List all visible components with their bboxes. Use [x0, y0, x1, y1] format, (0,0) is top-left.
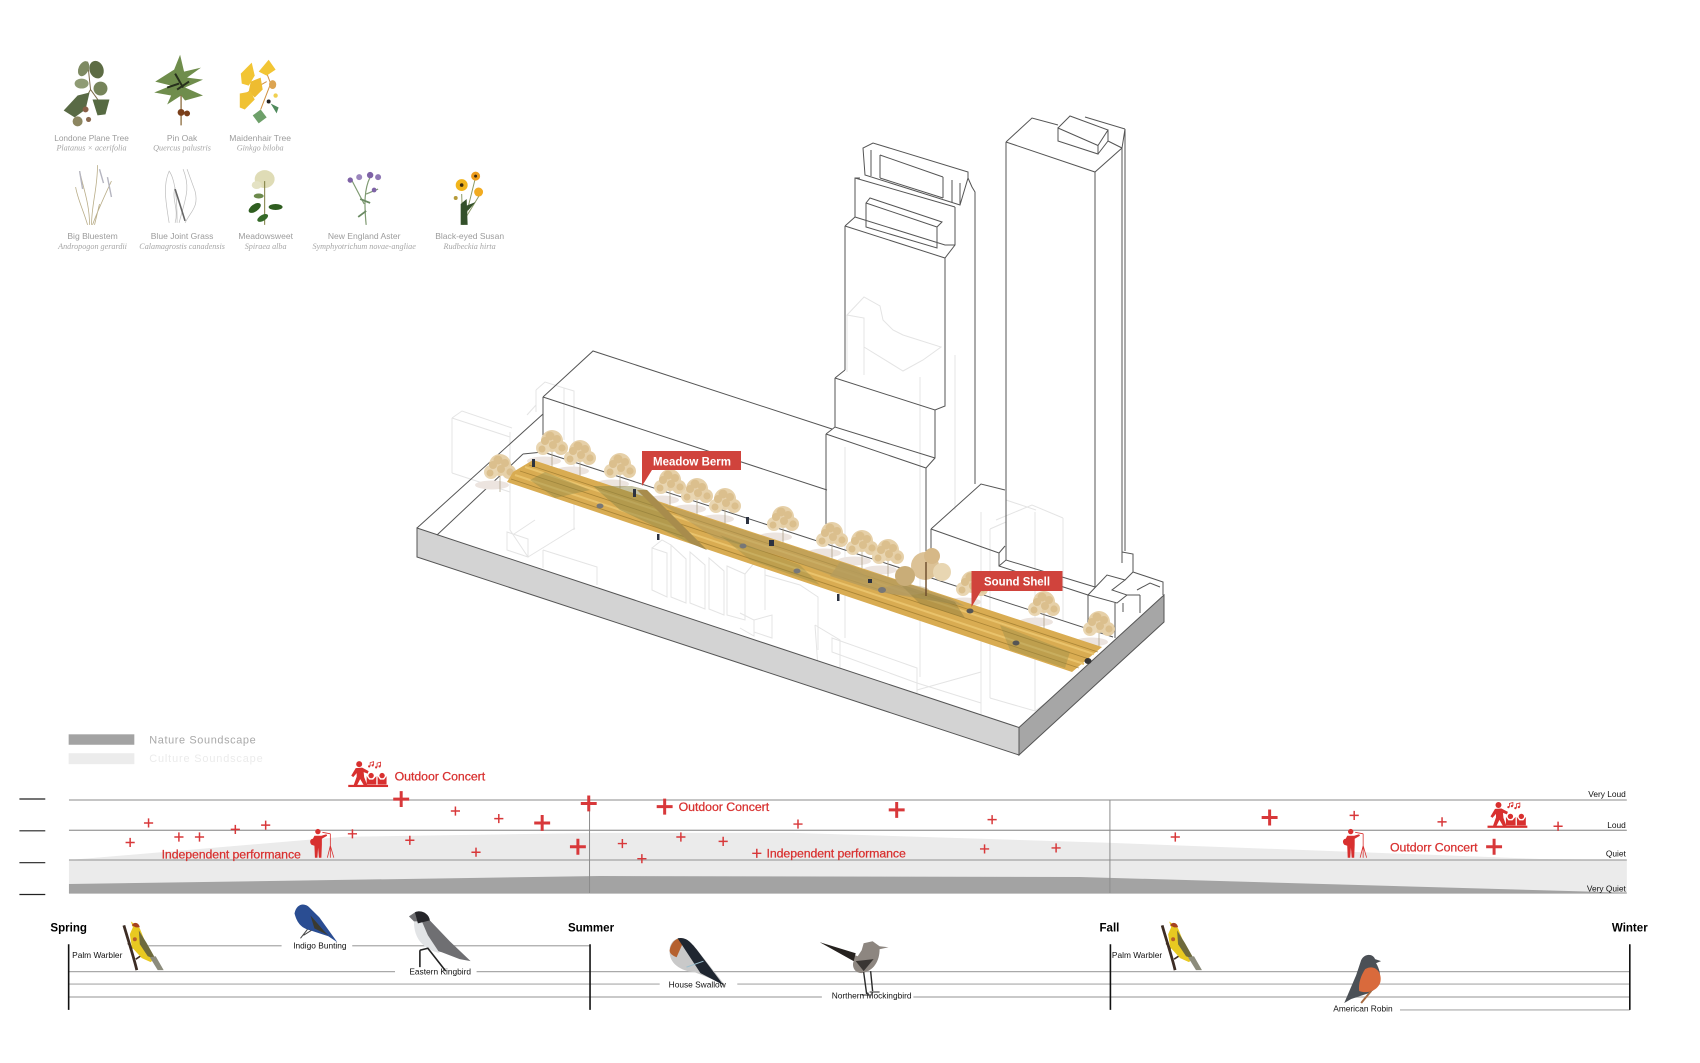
season bars [69, 944, 1630, 1010]
plant name: Maidenhair Tree [229, 133, 291, 153]
legend swatch: nature [69, 734, 134, 745]
plant name: Meadowsweet: Meadowsweet [238, 231, 294, 241]
bird: American Robin [1344, 955, 1381, 1003]
season labels: Fall [1099, 922, 1119, 934]
plant name: Big Bluestem: Big Bluestem [67, 231, 118, 241]
large event markers [393, 791, 1502, 855]
level lines [69, 800, 1627, 893]
bird: Indigo Bunting [295, 905, 337, 942]
meadow berm crossing [593, 486, 707, 550]
label: Independent performance: Independent performance [162, 848, 301, 862]
left axis ticks [19, 799, 45, 895]
bird: Palm Warbler (fall) [1162, 921, 1202, 970]
plant name: Pin Oak [153, 133, 211, 153]
plant name: Pin Oak: Quercus palustris [153, 144, 211, 153]
tall tower [1006, 116, 1125, 588]
plant: Blue Joint Grass [165, 169, 196, 223]
icon: singer [1343, 829, 1367, 858]
plant name: Big Bluestem: Andropogon gerardii [57, 242, 128, 251]
people on walkway [532, 459, 1092, 664]
bird: House Swallow [670, 938, 726, 987]
base slab: top outline [417, 414, 543, 535]
plant: Pin Oak [154, 55, 203, 125]
plant name: Big Bluestem [57, 231, 128, 251]
season labels: Winter [1612, 922, 1648, 934]
season labels [50, 922, 1648, 934]
plant name: New England Aster: New England Aster [328, 231, 401, 241]
callout: Meadow Berm: Meadow Berm [653, 456, 731, 468]
label: Eastern Kingbird: Eastern Kingbird [409, 967, 471, 977]
label: Outdoor Concert: Outdoor Concert [395, 770, 486, 784]
callout: Meadow Berm [642, 451, 741, 486]
mid tower [826, 143, 975, 560]
plant name: Meadowsweet: Spiraea alba [245, 242, 287, 251]
plant name: Blue Joint Grass: Blue Joint Grass [151, 231, 213, 241]
level labels: Quiet [1606, 849, 1627, 859]
plant name: Blue Joint Grass [139, 231, 225, 251]
low block [523, 351, 832, 490]
season labels: Spring [50, 922, 87, 934]
plant name: London Plane Tree [54, 133, 129, 153]
base slab: front face [417, 528, 1019, 755]
legend swatch: culture [69, 753, 134, 764]
callout: Sound Shell: Sound Shell [984, 576, 1050, 588]
level labels [1587, 789, 1627, 894]
plant name: Black-eyed Susan: Rudbeckia hirta [443, 242, 496, 251]
soundscape chart [19, 761, 1627, 895]
faint neighbouring buildings [452, 297, 1063, 716]
plant name: Black-eyed Susan [435, 231, 504, 251]
label: House Swallow: House Swallow [669, 980, 727, 990]
bird: Palm Warbler (spring) [124, 921, 164, 970]
culture soundscape area [69, 833, 1627, 893]
plant: Maidenhair Tree [240, 60, 279, 123]
label: American Robin: American Robin [1333, 1004, 1393, 1014]
label: Outdoor Concert: Outdoor Concert [679, 800, 770, 814]
base slab: side face [1019, 595, 1164, 755]
elevated walkway edge [543, 452, 1113, 637]
plant: Black-eyed Susan [454, 172, 483, 225]
plant name: Maidenhair Tree: Maidenhair Tree [229, 133, 291, 143]
soundscape legend [69, 734, 263, 765]
plaza [660, 503, 880, 585]
label: Palm Warbler: Palm Warbler [72, 950, 123, 960]
plant name: New England Aster [313, 231, 416, 251]
plant: Meadowsweet [247, 170, 283, 225]
large tree at plaza [881, 548, 951, 596]
plant name: Pin Oak: Pin Oak [167, 133, 198, 143]
nature soundscape area [69, 876, 1627, 893]
plant name: Blue Joint Grass: Calamagrostis canadensis [139, 242, 225, 251]
plant legend [54, 55, 504, 251]
label: Independent performance: Independent performance [767, 847, 906, 861]
icon: concert [348, 761, 388, 787]
icon: concert [1488, 802, 1527, 828]
legend label: culture: Culture Soundscape [149, 753, 263, 765]
staff lines [69, 946, 1630, 1010]
meadow walkway band [507, 460, 1102, 672]
legend label: nature: Nature Soundscape [149, 734, 256, 746]
plant name: Meadowsweet [238, 231, 294, 251]
callout: Sound Shell [972, 571, 1062, 607]
plant: Big Bluestem [76, 165, 111, 225]
icon: singer [310, 829, 334, 858]
label: Outdorr Concert: Outdorr Concert [1390, 841, 1478, 855]
plant name: Black-eyed Susan: Black-eyed Susan [435, 231, 504, 241]
bird timeline [50, 905, 1648, 1014]
level labels: Loud [1607, 820, 1626, 830]
small podium blocks [931, 484, 1163, 638]
label: Northern Mockingbird: Northern Mockingbird [832, 990, 912, 1000]
bird: Eastern Kingbird [409, 911, 471, 971]
label: Palm Warbler: Palm Warbler [1112, 950, 1162, 960]
plant name: London Plane Tree: Platanus × acerifolia [55, 144, 127, 153]
level labels: Very Loud [1588, 789, 1626, 799]
season labels: Summer [568, 922, 615, 934]
plant name: London Plane Tree: Londone Plane Tree [54, 133, 129, 143]
bird: Northern Mockingbird [820, 941, 889, 995]
plant name: Maidenhair Tree: Ginkgo biloba [237, 144, 284, 153]
small event markers [126, 806, 1563, 863]
plant: New England Aster [348, 172, 381, 225]
trees along the walkway [475, 430, 1115, 649]
axonometric building model [417, 116, 1164, 755]
plant name: New England Aster: Symphyotrichum novae-angliae [313, 242, 416, 251]
level labels: Very Quiet [1587, 884, 1626, 894]
plant: London Plane Tree [64, 59, 109, 126]
label: Indigo Bunting: Indigo Bunting [293, 941, 347, 951]
